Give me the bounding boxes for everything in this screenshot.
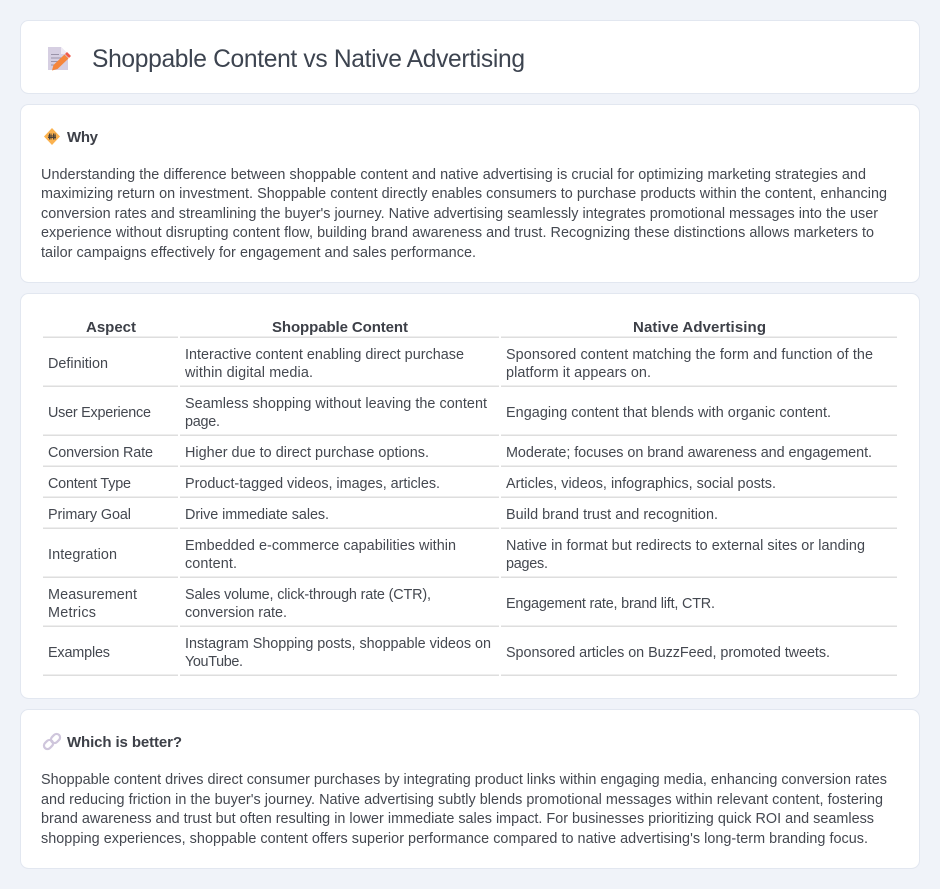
- row: user experience: [48, 396, 831, 430]
- row: conversion rate: Moderate; focuses on brand awareness and engagement.: [506, 445, 872, 461]
- row: user experience: Engaging content that blends with organic content.: [506, 405, 831, 421]
- row: definition: Interactive content enabling direct purchase: [185, 347, 464, 363]
- row: measurement metrics: conversion rate.: [185, 605, 287, 621]
- row: primary goal: [48, 507, 718, 523]
- table header row: [86, 319, 766, 336]
- row: content type: Product-tagged videos, images, articles.: [185, 476, 440, 492]
- row: examples: [48, 636, 830, 670]
- row: user experience: Seamless shopping without leaving the content: [185, 396, 487, 412]
- heading: why: Why: [67, 129, 99, 146]
- row: primary goal: Drive immediate sales.: [185, 507, 329, 523]
- row: examples: YouTube.: [185, 654, 243, 670]
- why paragraph: conversion rates and streamlining the buyer's journey. Native advertising seamlessly integrates promotional messages into the user: [41, 206, 878, 222]
- row: definition: platform it appears on.: [506, 365, 651, 381]
- why paragraph: tailor campaigns effectively for engagement and sales performance.: [41, 245, 476, 261]
- why paragraph: [41, 167, 887, 261]
- panel: which is better: [20, 710, 920, 868]
- row: measurement metrics: Engagement rate, brand lift, CTR.: [506, 596, 715, 612]
- icon: document with pencil: [48, 47, 71, 70]
- row: integration: Native in format but redirects to external sites or landing: [506, 538, 865, 554]
- title: Shoppable Content vs Native Advertising: [92, 46, 525, 73]
- icon: link chain: [42, 732, 62, 751]
- which is better paragraph: Shoppable content drives direct consumer purchases by integrating product links within engaging media, enhancing conversion rates: [41, 772, 887, 788]
- row: examples: Instagram Shopping posts, shoppable videos on: [185, 636, 491, 652]
- row: content type: Content Type: [48, 476, 131, 492]
- row: integration: content.: [185, 556, 237, 572]
- row: definition: [48, 347, 873, 381]
- row: measurement metrics: [48, 587, 715, 621]
- row: integration: Integration: [48, 547, 117, 563]
- why paragraph: experience without disrupting content flow, building brand awareness and trust. Recognizing these distinctions allows marketers to: [41, 225, 874, 241]
- row: conversion rate: [48, 445, 872, 461]
- row: content type: Articles, videos, infographics, social posts.: [506, 476, 776, 492]
- row: definition: Definition: [48, 356, 108, 372]
- why paragraph: Understanding the difference between shoppable content and native advertising is crucial for optimizing marketing strategies and: [41, 167, 866, 183]
- table header row: Aspect: [86, 319, 136, 336]
- panel: why: [20, 104, 920, 282]
- row: examples: Sponsored articles on BuzzFeed, promoted tweets.: [506, 645, 830, 661]
- row: definition: Sponsored content matching the form and function of the: [506, 347, 873, 363]
- row: examples: Examples: [48, 645, 110, 661]
- row: measurement metrics: Measurement: [48, 587, 137, 603]
- row: measurement metrics: Sales volume, click-through rate (CTR),: [185, 587, 431, 603]
- icon: warning diamond: [44, 128, 60, 145]
- which is better paragraph: brand awareness and trust but often resulting in lower immediate sales impact. For businesses prioritizing quick ROI and seamless: [41, 811, 874, 827]
- which is better paragraph: [41, 772, 887, 847]
- row: definition: within digital media.: [184, 365, 313, 381]
- row: conversion rate: Conversion Rate: [48, 445, 153, 461]
- table header row: Native Advertising: [633, 319, 766, 336]
- row: measurement metrics: Metrics: [48, 605, 96, 621]
- table rule lines: [43, 336, 897, 676]
- row: primary goal: Build brand trust and recognition.: [506, 507, 718, 523]
- why paragraph: maximizing return on investment. Shoppable content directly enables consumers to purchase products within the content, enhancing: [41, 186, 887, 202]
- table header row: Shoppable Content: [272, 319, 408, 336]
- row: user experience: page.: [185, 414, 220, 430]
- row: integration: Embedded e-commerce capabilities within: [185, 538, 456, 554]
- panel: comparison table: [20, 294, 920, 698]
- row: conversion rate: Higher due to direct purchase options.: [185, 445, 429, 461]
- row: integration: pages.: [506, 556, 548, 572]
- which is better paragraph: shopping experiences, shoppable content offers superior performance compared to native advertising's long-term branding focus.: [41, 831, 868, 847]
- row: user experience: User Experience: [48, 405, 151, 421]
- row: primary goal: Primary Goal: [48, 507, 131, 523]
- row: content type: [48, 476, 776, 492]
- panel: title header: [20, 20, 920, 94]
- which is better paragraph: and reducing friction in the buyer's journey. Native advertising subtly blends promotional messages within relevant content, fostering: [41, 792, 883, 808]
- row: integration: [48, 538, 865, 572]
- heading: which is better: Which is better?: [67, 734, 182, 751]
